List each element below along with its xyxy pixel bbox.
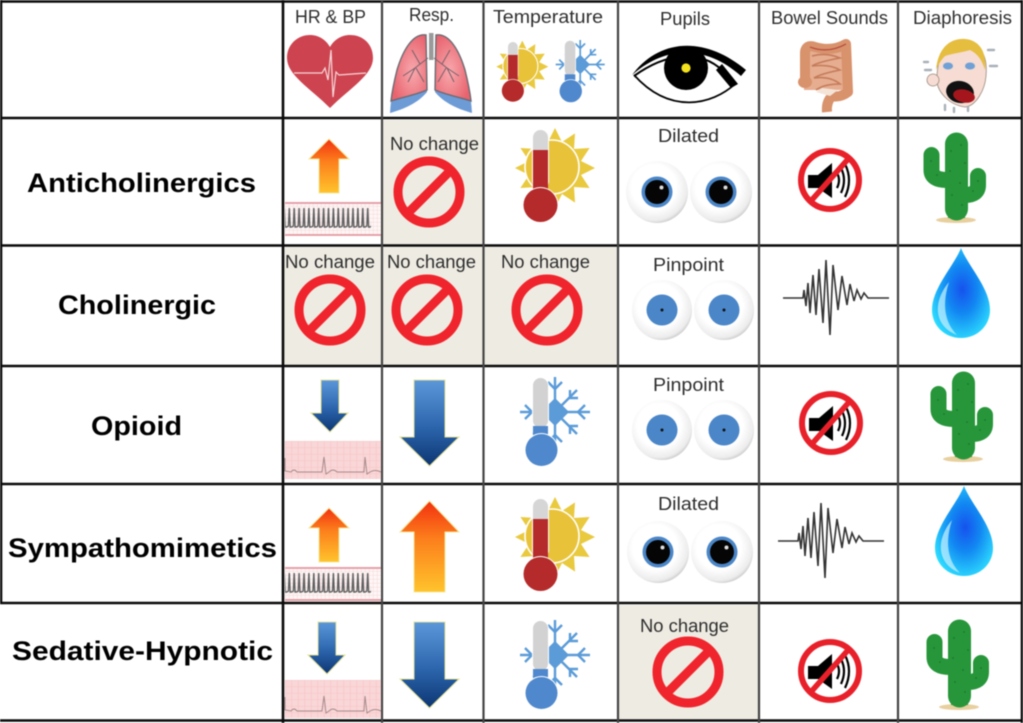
row: Sympathomimetics xyxy=(8,486,993,601)
pupils: dilated xyxy=(627,493,753,583)
HR arrow up xyxy=(309,508,349,562)
no-change cell backgrounds xyxy=(284,120,759,719)
icon: cold thermometer xyxy=(556,40,605,103)
icon: intestines xyxy=(798,44,848,112)
header: HR & BP: HR & BP xyxy=(295,6,366,27)
header: Bowel Sounds: Bowel Sounds xyxy=(771,7,888,28)
pupils: pinpoint xyxy=(632,374,754,460)
diaphoresis: water drop xyxy=(935,486,993,576)
resp arrow down xyxy=(400,380,459,466)
HR: no change xyxy=(285,251,375,341)
row label: Sympathomimetics xyxy=(8,533,277,563)
header: Temperature xyxy=(493,6,605,103)
row label: Opioid xyxy=(91,411,182,441)
icon: heart with ECG xyxy=(287,35,373,108)
resp: no change: No change xyxy=(387,251,476,272)
pupils: dilated: Dilated xyxy=(658,493,719,514)
HR arrow up xyxy=(309,139,349,193)
bowel sounds: absent xyxy=(801,151,859,209)
fast ECG strip xyxy=(285,567,381,601)
icon: sweating face xyxy=(924,39,997,112)
header: HR & BP xyxy=(287,6,373,108)
resp: no change xyxy=(390,133,479,223)
pupils: no change: No change xyxy=(640,615,729,636)
fast ECG strip xyxy=(285,202,381,236)
temperature: hot xyxy=(515,497,595,592)
pupils: pinpoint: Pinpoint xyxy=(653,374,724,395)
bowel sounds: absent xyxy=(801,642,859,700)
resp: no change: No change xyxy=(390,133,479,154)
icon: lungs xyxy=(390,33,472,113)
row label: Anticholinergics xyxy=(27,168,256,198)
icon: hot thermometer xyxy=(496,41,548,102)
header: Diaphoresis: Diaphoresis xyxy=(913,7,1012,28)
diaphoresis: water drop xyxy=(932,248,990,338)
icon: large eye xyxy=(632,46,746,102)
temperature: no change: No change xyxy=(501,251,590,272)
diaphoresis: dry cactus xyxy=(930,144,979,223)
bowel sounds: absent xyxy=(802,394,860,452)
temperature: cold xyxy=(520,377,590,467)
slow ECG strip xyxy=(285,441,381,479)
HR arrow down xyxy=(308,622,345,674)
header: Resp. xyxy=(390,4,472,113)
temperature: no change xyxy=(501,251,590,341)
row: Cholinergic xyxy=(58,248,990,341)
bowel sounds: hyperactive wave xyxy=(783,260,889,335)
pupils: dilated: Dilated xyxy=(658,125,719,146)
resp arrow down xyxy=(400,622,459,708)
header row xyxy=(287,4,1012,113)
row label: Sedative-Hypnotic xyxy=(12,636,273,666)
row: Sedative-Hypnotic xyxy=(12,615,982,718)
HR: no change: No change xyxy=(285,251,375,272)
resp: no change xyxy=(387,251,476,341)
HR arrow down xyxy=(311,380,348,432)
row: Anticholinergics xyxy=(27,125,979,236)
header: Pupils xyxy=(632,8,746,102)
header: Pupils: Pupils xyxy=(660,8,710,29)
pupils: dilated xyxy=(626,125,752,223)
diaphoresis: dry cactus xyxy=(933,631,982,710)
pupils: pinpoint: Pinpoint xyxy=(653,254,724,275)
resp arrow up xyxy=(400,501,459,592)
row: Opioid xyxy=(91,374,986,479)
row label: Cholinergic xyxy=(58,290,216,320)
diaphoresis: dry cactus xyxy=(937,383,986,462)
header: Resp.: Resp. xyxy=(409,4,454,25)
pupils: no change xyxy=(640,615,729,703)
temperature: hot xyxy=(515,128,595,223)
header: Temperature: Temperature xyxy=(493,6,603,27)
header: Diaphoresis xyxy=(913,7,1012,112)
header: Bowel Sounds xyxy=(771,7,888,112)
slow ECG strip xyxy=(285,680,381,718)
bowel sounds: hyperactive wave xyxy=(778,503,884,578)
temperature: cold xyxy=(520,620,590,710)
pupils: pinpoint xyxy=(632,254,754,340)
